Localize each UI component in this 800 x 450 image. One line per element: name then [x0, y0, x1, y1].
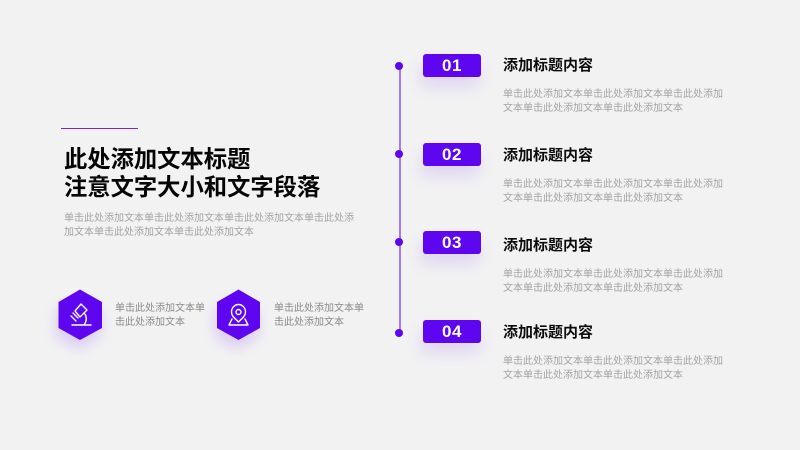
dot 03: [395, 238, 403, 246]
heading 01: 添加标题内容: [503, 57, 593, 74]
title: 此处添加文本标题: [64, 146, 250, 172]
badge 02: [423, 143, 481, 166]
text 02: 单击此处添加文本单击此处添加文本单击此处添加: [503, 179, 723, 190]
icon text 2: 单击此处添加文本单: [274, 303, 364, 314]
badge 01: [423, 54, 481, 77]
text 03: [503, 268, 723, 294]
icon text 1: 单击此处添加文本单: [115, 303, 205, 314]
timeline item 04: [395, 320, 723, 381]
badge 03: 03: [442, 233, 462, 252]
icon text 2: 击此处添加文本: [274, 317, 344, 328]
text 03: 文本单击此处添加文本单击此处添加文本: [503, 283, 683, 294]
icon text 2: [274, 302, 364, 328]
timeline line: [399, 66, 400, 334]
text 01: 单击此处添加文本单击此处添加文本单击此处添加: [503, 89, 723, 100]
badge 04: 04: [442, 322, 462, 341]
accent line: [61, 128, 138, 129]
text 01: [503, 88, 723, 114]
dot 01: [395, 62, 403, 70]
text 04: 单击此处添加文本单击此处添加文本单击此处添加: [503, 356, 723, 367]
icon text 1: 击此处添加文本: [115, 317, 185, 328]
badge 03: [423, 231, 481, 254]
timeline item 02: [395, 143, 723, 204]
dot 04: [395, 329, 403, 337]
badge 01: 01: [442, 56, 462, 75]
dot 02: [395, 150, 403, 158]
heading 04: 添加标题内容: [503, 324, 593, 341]
badge 02: 02: [442, 145, 462, 164]
heading 03: 添加标题内容: [503, 237, 593, 254]
icon: microscope hexagon: [50, 290, 106, 352]
text 01: 文本单击此处添加文本单击此处添加文本: [503, 103, 683, 114]
text 02: 文本单击此处添加文本单击此处添加文本: [503, 193, 683, 204]
description text: [64, 212, 354, 238]
timeline item 03: [395, 231, 723, 294]
description text: 加文本单击此处添加文本单击此处添加文本: [64, 227, 254, 238]
badge 04: [423, 320, 481, 343]
timeline item 01: [395, 54, 723, 114]
text 04: 文本单击此处添加文本单击此处添加文本: [503, 370, 683, 381]
description text: 单击此处添加文本单击此处添加文本单击此处添加文本单击此处添: [64, 213, 354, 224]
heading 02: 添加标题内容: [503, 147, 593, 164]
text 04: [503, 355, 723, 381]
title: [64, 146, 320, 200]
text 03: 单击此处添加文本单击此处添加文本单击此处添加: [503, 269, 723, 280]
icon: location pin hexagon: [210, 290, 264, 352]
title: 注意文字大小和文字段落: [64, 174, 320, 200]
icon text 1: [115, 302, 205, 328]
text 02: [503, 178, 723, 204]
